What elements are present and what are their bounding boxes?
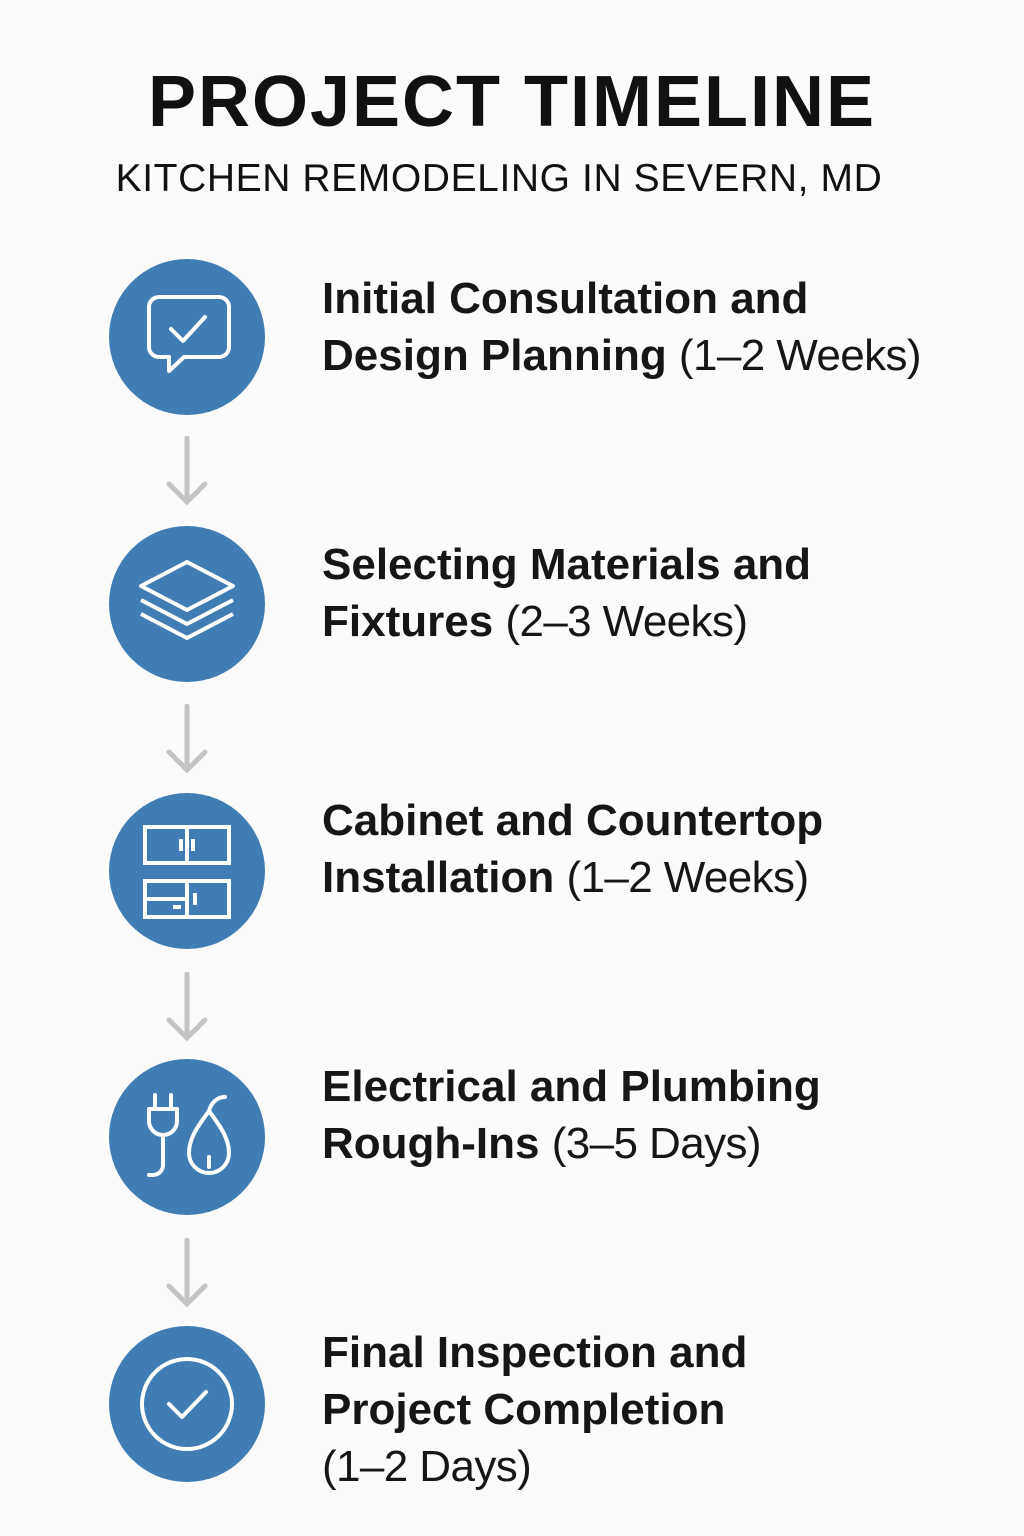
step 5 text: (1–2 Days) [322, 1442, 531, 1491]
step 5 text: Project Completion [322, 1385, 725, 1434]
step 3 icon: cabinets [109, 793, 265, 949]
step 2 text: Fixtures (2–3 Weeks) [322, 597, 747, 646]
arrow 1 [166, 436, 208, 506]
step 3 text: Installation (1–2 Weeks) [322, 853, 809, 902]
arrow 2 [166, 704, 208, 774]
step 5 text: Final Inspection and [322, 1328, 747, 1377]
subtitle: KITCHEN REMODELING IN SEVERN, MD [116, 157, 882, 200]
step 4 text: Rough-Ins (3–5 Days) [322, 1119, 761, 1168]
title: PROJECT TIMELINE [148, 62, 876, 142]
arrow 3 [166, 972, 208, 1042]
step 3 text [322, 796, 823, 902]
step 1 icon: chat check [109, 259, 265, 415]
step 2 icon: layers [109, 526, 265, 682]
step 5 icon: check circle [109, 1326, 265, 1482]
step 1 text [322, 274, 921, 380]
step 1 text: Design Planning (1–2 Weeks) [322, 331, 921, 380]
step 4 text: Electrical and Plumbing [322, 1062, 821, 1111]
step 5 text [322, 1328, 747, 1491]
step 1 text: Initial Consultation and [322, 274, 808, 323]
arrow 4 [166, 1238, 208, 1308]
step 2 text: Selecting Materials and [322, 540, 811, 589]
step 2 text [322, 540, 811, 646]
step 4 text [322, 1062, 821, 1168]
step 3 text: Cabinet and Countertop [322, 796, 823, 845]
step 4 icon: plug and drop [109, 1059, 265, 1215]
